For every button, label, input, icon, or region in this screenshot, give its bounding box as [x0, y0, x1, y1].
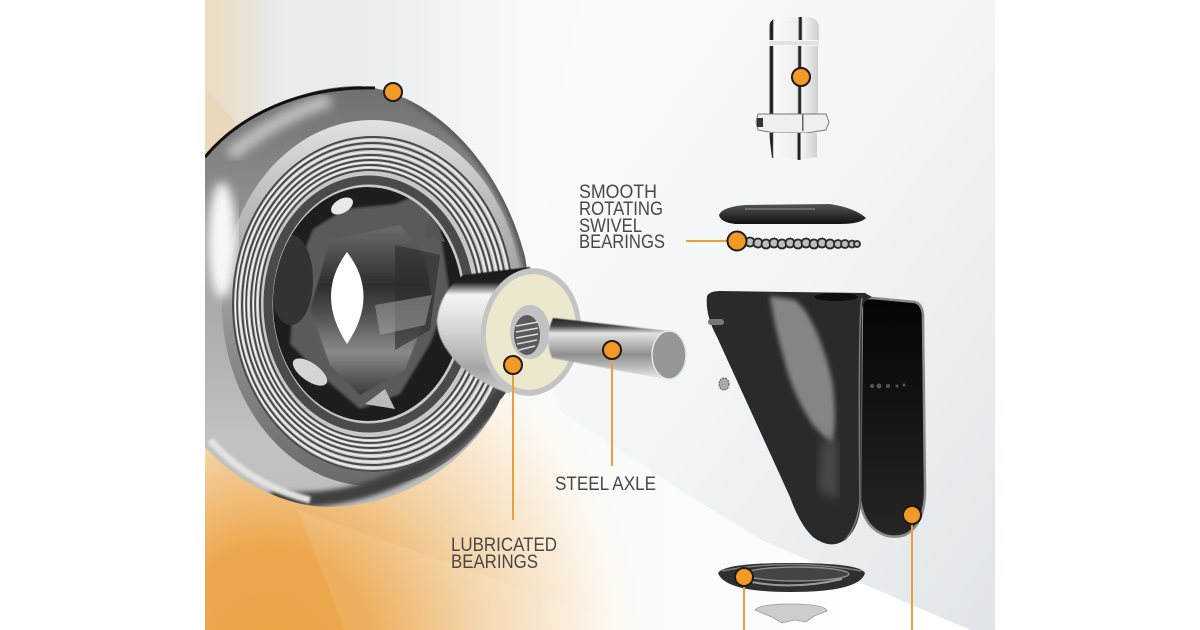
- front fork leg: [707, 291, 872, 544]
- callout leader lines: [513, 241, 912, 630]
- callout dots: [384, 68, 921, 586]
- wheel: [205, 86, 530, 507]
- bearing cylinder: [437, 263, 587, 401]
- steel axle shaft: [548, 318, 686, 379]
- upper bearing plate: [719, 204, 866, 224]
- label: lubricated bearings: [451, 535, 557, 573]
- lower plate: [718, 563, 865, 592]
- label: steel axle: STEEL AXLE: [555, 474, 656, 495]
- wheel hub interior: [269, 187, 463, 421]
- swivel ball bearing chain: [746, 238, 860, 248]
- infographic: exploded caster wheel diagram: [205, 0, 995, 630]
- lower washer: [755, 604, 827, 623]
- label: smooth rotating swivel bearings: BEARINGS: [579, 232, 665, 253]
- threaded stud: [719, 378, 729, 390]
- wheel ribbed ring: [232, 136, 514, 472]
- fork housing: [707, 291, 925, 544]
- label: lubricated bearings: LUBRICATED: [451, 535, 557, 556]
- axle assembly: [437, 263, 686, 401]
- label: smooth rotating swivel bearings: SMOOTH: [579, 182, 657, 203]
- threaded bore: [510, 305, 550, 359]
- swivel pin: [756, 17, 829, 160]
- label: smooth rotating swivel bearings: [579, 182, 665, 253]
- background panel: [205, 0, 995, 630]
- label: smooth rotating swivel bearings: SWIVEL: [579, 216, 642, 237]
- label: smooth rotating swivel bearings: ROTATING: [579, 199, 663, 220]
- rear fork leg: [860, 298, 925, 537]
- label: lubricated bearings: BEARINGS: [451, 552, 538, 573]
- wheel outer rim: [205, 86, 530, 507]
